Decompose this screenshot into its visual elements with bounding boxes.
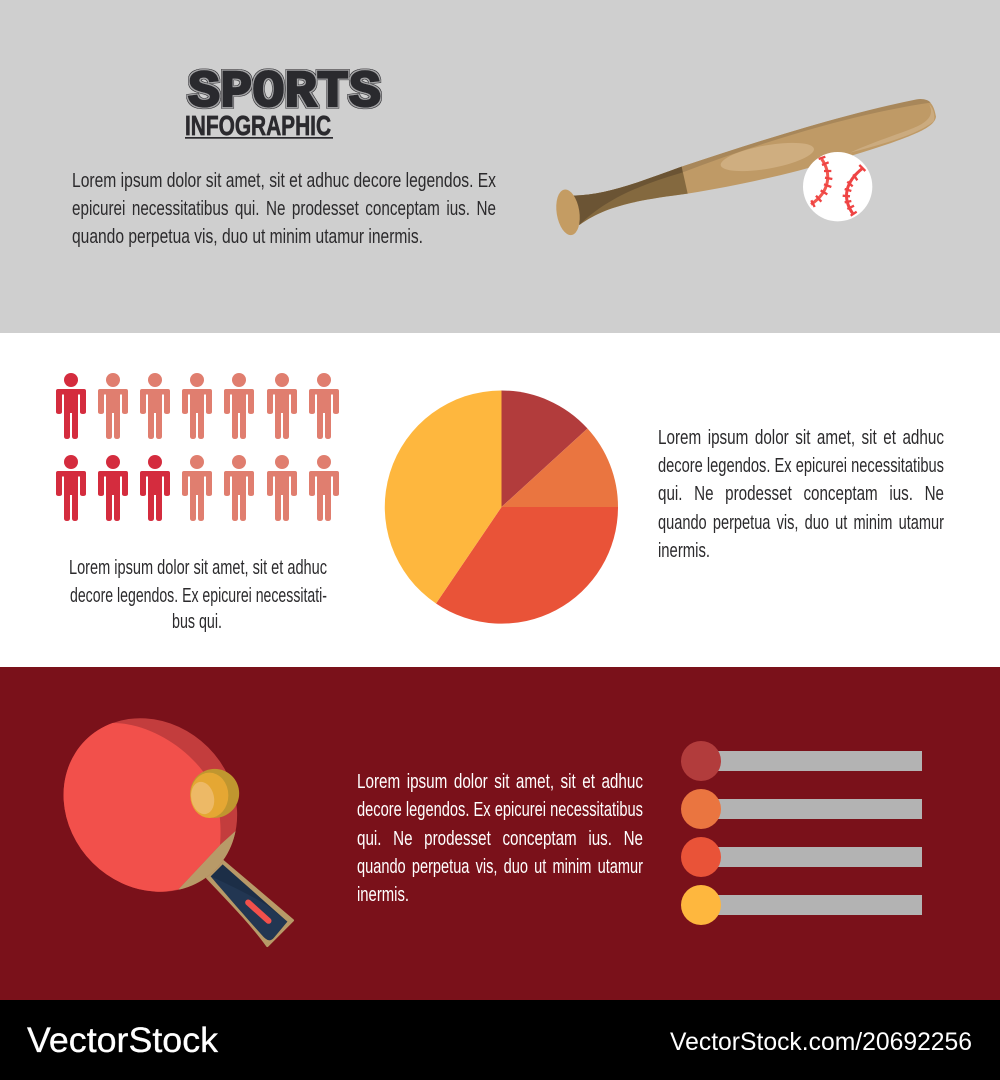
text block: intro [72,169,497,248]
text block: pie description: inermis. [658,539,710,562]
text block: paddle description: inermis. [357,883,409,906]
title: INFOGRAPHIC [185,110,331,141]
chart: pie [385,390,618,624]
legend: bars [681,741,922,925]
panel: watermark bar [0,1000,1000,1080]
legend row 3 [681,837,922,877]
panel: bottom background [0,667,1000,1000]
text block: paddle description: decore legendos. Ex epicurei necessitatibus [357,798,643,821]
text block: intro: Lorem ipsum dolor sit amet, sit et adhuc decore legendos. Ex [72,169,497,192]
panel: header background [0,0,1000,333]
row 1 people [56,373,339,439]
text block: paddle description: qui. Ne prodesset conceptam ius. Ne [357,827,643,850]
watermark: url: VectorStock.com/20692256 [670,1028,972,1056]
text block: people caption: decore legendos. Ex epicurei necessitati- [70,584,327,607]
paddle handle [207,861,293,946]
text block: people caption: Lorem ipsum dolor sit amet, sit et adhuc [69,556,327,579]
watermark: logo: VectorStock [27,1021,219,1060]
legend row 4 [681,885,922,925]
chart: people pictogram [56,373,339,521]
text block: paddle description: Lorem ipsum dolor sit amet, sit et adhuc [357,770,643,793]
text block: intro: quando perpetua vis, duo ut minim utamur inermis. [72,225,423,248]
text block: pie description [658,426,944,562]
icon: baseball [803,152,872,221]
text block: intro: epicurei necessitatibus qui. Ne prodesset conceptam ius. Ne [72,197,496,220]
text block: people caption [69,556,327,633]
icon: baseball bat [553,99,936,237]
text block: paddle description: quando perpetua vis, duo ut minim utamur [357,855,643,878]
text block: paddle description [357,770,643,906]
paddle head [64,718,238,892]
row 2 people [56,455,339,521]
title: SPORTS [188,63,381,122]
legend row 2 [681,789,922,829]
icon: ping pong ball [188,769,239,818]
icon: table tennis paddle [50,705,293,946]
text block: people caption: bus qui. [172,610,222,633]
panel: middle background [0,333,1000,667]
legend row 1 [681,741,922,781]
